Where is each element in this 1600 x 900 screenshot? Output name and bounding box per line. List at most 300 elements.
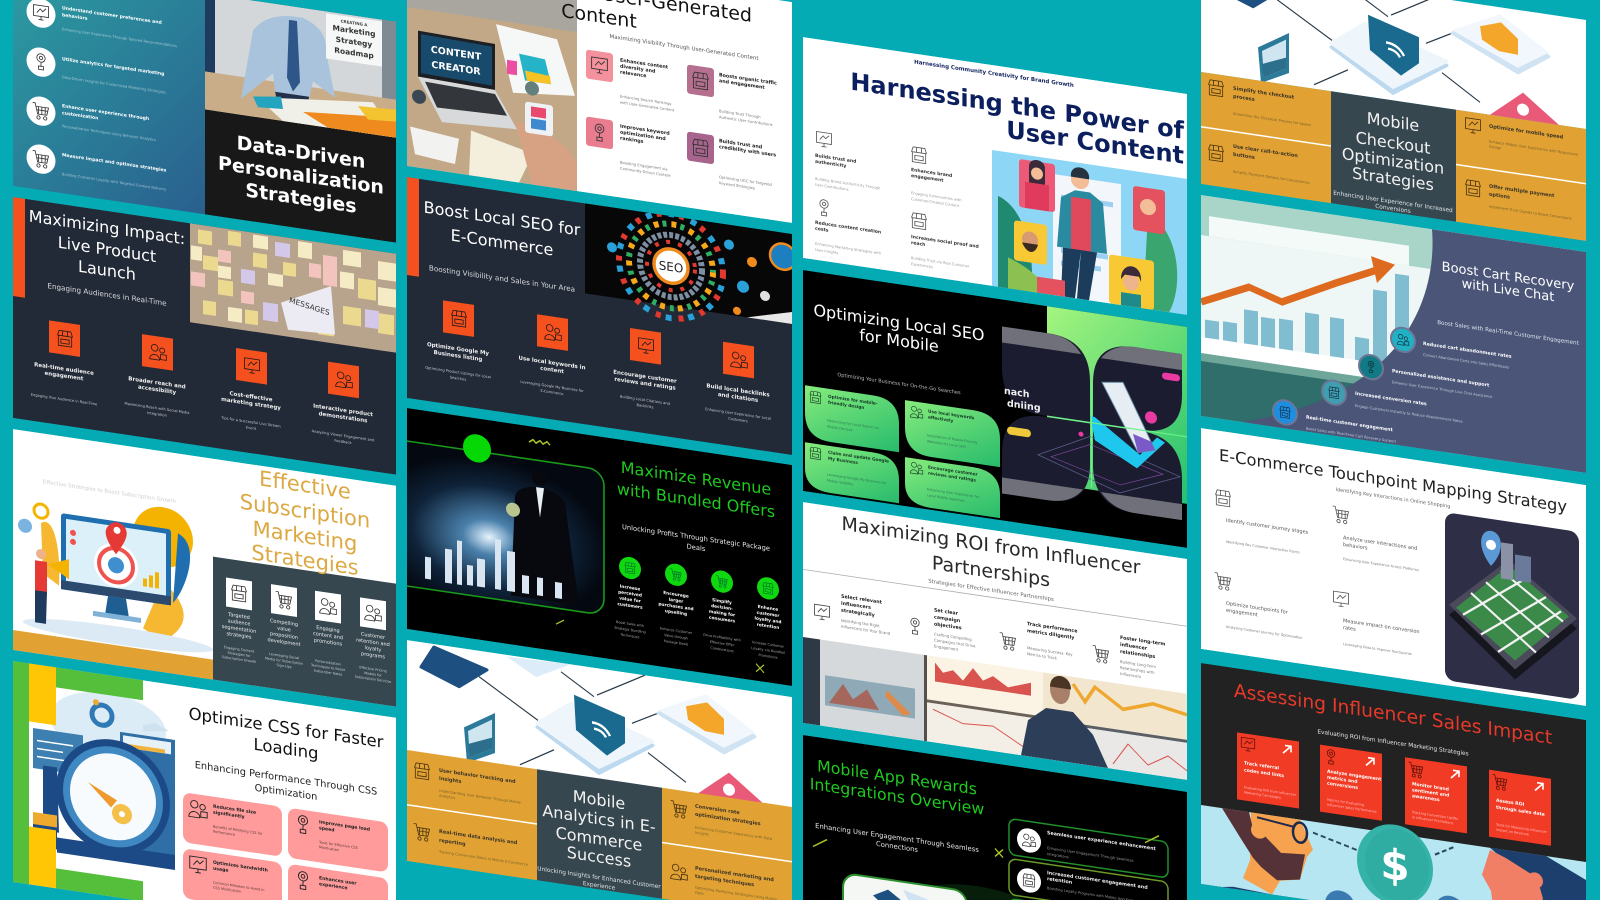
subtitle: Effective Strategies to Boost Subscription Growth bbox=[43, 479, 176, 505]
benefit cards: with User-Generated Content bbox=[620, 101, 675, 113]
dark title panel: Unlocking Insights for Enhanced Customer bbox=[537, 866, 661, 891]
green leaf cards: Encourage customer bbox=[928, 465, 979, 478]
feature icons and text: Analyzing Viewer Engagement and bbox=[312, 429, 374, 442]
title: Maximizing Impact: bbox=[29, 206, 185, 248]
pink benefit cards: Enhances user bbox=[319, 875, 357, 887]
title: for Mobile bbox=[859, 325, 939, 356]
illustration: target monitor bbox=[18, 486, 213, 659]
red metric cards: Assess ROI bbox=[1496, 798, 1525, 808]
feature icons and text bbox=[425, 298, 771, 427]
subtitle: Deals bbox=[687, 542, 706, 553]
slide: Maximizing ROI from Influencer Partnerships bbox=[803, 502, 1187, 780]
photo: content creator desk bbox=[407, 0, 577, 191]
feature circles and text: value for bbox=[619, 595, 642, 605]
list items with teal circles: Increased conversion rates bbox=[1355, 391, 1427, 407]
gold left panel bbox=[407, 750, 537, 880]
title bbox=[424, 198, 581, 264]
dark feature panel: content and bbox=[313, 631, 343, 641]
slide: Mobile App Rewards Integrations Overview bbox=[803, 735, 1187, 900]
outlined image bbox=[843, 873, 967, 900]
green leaf cards: Use local keywords bbox=[928, 409, 975, 421]
four strategy items: Building Long-Term bbox=[1120, 659, 1156, 669]
illustration: creators bbox=[992, 150, 1187, 315]
outlined feature items bbox=[1009, 818, 1168, 900]
benefit cards: Enhances content bbox=[620, 58, 669, 71]
list items with teal circles: Reduced cart abandonment rates bbox=[1423, 341, 1512, 360]
pink benefit cards: Common Mistakes to Avoid in bbox=[213, 881, 264, 892]
benefit cards: Boosting Engagement via bbox=[620, 161, 668, 172]
photo: content creator desk: CONTENT bbox=[431, 45, 482, 63]
outlined feature items: retention bbox=[1047, 876, 1073, 886]
dark title panel: Analytics in E- bbox=[542, 801, 656, 837]
four strategy items: Metrics to Track bbox=[1027, 651, 1058, 661]
feature circles and text: upselling bbox=[665, 608, 687, 617]
four touchpoint cards: Measure impact on conversion bbox=[1343, 618, 1420, 635]
title: E-Commerce bbox=[451, 226, 553, 260]
title: Mobile App Rewards bbox=[817, 756, 977, 799]
feature icons and text: Interactive product bbox=[313, 403, 373, 418]
title: E-Commerce Touchpoint Mapping Strategy bbox=[1219, 446, 1567, 516]
four strategy items: strategically bbox=[841, 608, 876, 619]
title bbox=[218, 128, 384, 222]
four strategy items: Crafting Compelling bbox=[934, 631, 972, 642]
subtitle: Connections bbox=[876, 840, 918, 854]
list items: Personalization Techniques Using Behavior Analytics bbox=[62, 124, 156, 142]
illustration: commerce network bbox=[407, 640, 792, 811]
red metric cards: awareness bbox=[1412, 793, 1440, 803]
image: isometric city block bbox=[1445, 512, 1579, 700]
red metric cards: Marketing Campaigns bbox=[1244, 790, 1281, 800]
dash decorations bbox=[813, 784, 1159, 898]
illustration: speed gauge bbox=[33, 682, 175, 870]
dark title panel: Conversions bbox=[1375, 204, 1411, 215]
feature icons and text bbox=[31, 318, 374, 448]
list items: Measure impact and optimize strategies bbox=[62, 152, 167, 174]
title: Data-Driven bbox=[237, 131, 365, 173]
pink benefit cards: Performance bbox=[213, 830, 235, 837]
feature circles and text: Techniques bbox=[620, 632, 640, 639]
feature icons and text: Customers bbox=[728, 417, 748, 423]
feature icons and text: marketing strategy bbox=[221, 397, 281, 412]
red metric cards: Tools for Measuring Influencer bbox=[1495, 823, 1547, 834]
subtitle: Engaging Audiences in Real-Time bbox=[47, 281, 167, 308]
gold left panel: Real-time data analysis and bbox=[439, 829, 518, 846]
feature circles and text: Enhance bbox=[758, 604, 778, 613]
divider line bbox=[803, 569, 1187, 627]
photo: businessman above city bbox=[387, 438, 604, 615]
four strategy items: influencer bbox=[1120, 642, 1148, 652]
dark title panel: Enhancing User Experience for Increased bbox=[1333, 191, 1453, 214]
four strategy items: campaign bbox=[934, 614, 961, 624]
red metric cards bbox=[1237, 732, 1551, 846]
four touchpoint cards: behaviors bbox=[1343, 542, 1368, 552]
red metric cards: in Influencer Promotions bbox=[1412, 815, 1453, 825]
slide: User-Generated Content bbox=[407, 0, 792, 223]
feature icons and text: Encourage customer bbox=[613, 370, 677, 385]
feature circles and text: Package Deals bbox=[664, 639, 689, 647]
four touchpoint cards: Analyzing Customer Journey for Optimization bbox=[1226, 625, 1302, 640]
title bbox=[189, 704, 384, 773]
feature list: User Contributions bbox=[815, 183, 849, 192]
slide: Mobile Checkout Optimization Strategies bbox=[1201, 0, 1586, 241]
feature icons and text: Feedback bbox=[334, 439, 352, 445]
illustration: commerce network bbox=[1201, 0, 1586, 131]
gold right panel: Design bbox=[1489, 145, 1501, 150]
title: Live Product bbox=[58, 233, 156, 266]
feature icons and text: content bbox=[540, 366, 564, 375]
title bbox=[29, 206, 185, 291]
dark feature panel: Personalization bbox=[315, 659, 341, 667]
dark feature panel: Leveraging Social bbox=[269, 652, 299, 660]
red metric cards: sentiment and bbox=[1412, 787, 1449, 799]
feature list: Customer-Created Content bbox=[911, 197, 960, 208]
feature list: Reduces content creation bbox=[815, 220, 881, 236]
dark title panel: Mobile bbox=[573, 787, 625, 813]
green leaf cards: Importance of Mobile-Friendly bbox=[927, 433, 978, 445]
subtitle: Enhancing Performance Through CSS bbox=[195, 760, 377, 798]
pink benefit cards: experience bbox=[319, 881, 348, 891]
four strategy items: Relationships with bbox=[1120, 665, 1155, 675]
dark feature panel: Engaging Content bbox=[224, 645, 255, 654]
photo: content creator desk: CREATOR bbox=[431, 60, 481, 78]
illustration: faces and dollar coin bbox=[1201, 796, 1586, 900]
green leaf cards: effectively bbox=[928, 415, 954, 424]
four strategy items: Track performance bbox=[1027, 621, 1078, 635]
pink benefit cards: CSS Minification bbox=[213, 886, 241, 894]
gold left panel: Streamline the Checkout Process for Speed bbox=[1233, 112, 1311, 127]
red metric cards: Evaluating ROI from Influencer bbox=[1244, 785, 1297, 797]
dark feature panel: Effective Pricing bbox=[359, 665, 387, 673]
benefit cards: Enhancing Search Rankings bbox=[620, 95, 671, 106]
benefit cards: and engagement bbox=[719, 78, 765, 91]
feature icons and text: E-Commerce bbox=[540, 389, 564, 396]
list items with teal circles: Engage Customers Instantly to Reduce Abandonment Rates bbox=[1355, 404, 1463, 424]
four touchpoint cards: Identifying Key Customer Interaction Points bbox=[1226, 540, 1300, 555]
four strategy items: Foster long-term bbox=[1120, 635, 1165, 648]
benefit cards: Building Trust Through bbox=[719, 109, 761, 119]
feature circles and text: Boost Sales with bbox=[616, 620, 644, 628]
gold left panel: User behavior tracking and bbox=[439, 768, 516, 785]
squiggle decoration bbox=[529, 439, 550, 445]
slide: Optimize CSS for Faster Loading bbox=[13, 661, 396, 900]
feature icons and text: Building Local Citations and bbox=[620, 395, 670, 406]
feature icons and text: Tips for a Successful Live Stream bbox=[220, 416, 281, 429]
photo: sticky notes wall bbox=[190, 223, 396, 353]
title: Optimize CSS for Faster bbox=[189, 704, 384, 752]
gold left panel: insights bbox=[439, 776, 461, 785]
four strategy items: Influencers for Your Brand bbox=[841, 624, 891, 636]
image: phone and dark petals bbox=[1002, 326, 1187, 521]
feature icons and text: Enhancing User Experience for Local bbox=[705, 407, 771, 421]
dark title panel: Commerce bbox=[556, 823, 642, 855]
outlined feature items: Increased customer engagement and bbox=[1047, 870, 1148, 891]
four strategy items: objectives bbox=[934, 621, 962, 631]
dark feature panel: Media for Subscription bbox=[265, 656, 303, 666]
slide: Maximize Revenue with Bundled Offers bbox=[387, 405, 792, 686]
list items: Building Customer Loyalty with Targeted Content Delivery bbox=[62, 172, 167, 192]
slate curved panel bbox=[1241, 201, 1586, 473]
gold right panel: options bbox=[1489, 192, 1510, 201]
pink benefit cards: significantly bbox=[213, 810, 245, 820]
photo: marketing roadmap bbox=[205, 0, 396, 138]
red metric cards: through sales data bbox=[1496, 805, 1545, 818]
feature circles and text: Promotions bbox=[758, 653, 778, 660]
feature list bbox=[815, 131, 979, 276]
green leaf cards: reviews and ratings bbox=[928, 471, 976, 484]
dark feature panel bbox=[213, 557, 396, 707]
benefit cards: Authentic User Contributions bbox=[719, 115, 773, 127]
list items: Understand customer preferences and bbox=[62, 5, 162, 26]
gold left panel: Analytics bbox=[439, 794, 455, 800]
feature circles and text: Strategic Bundling bbox=[614, 626, 646, 634]
dark title panel: Mobile bbox=[1367, 109, 1419, 135]
benefit cards: relevance bbox=[620, 70, 647, 80]
feature list: User Insights bbox=[815, 248, 838, 255]
gold right panel: optimization strategies bbox=[695, 812, 761, 827]
green dot decoration bbox=[463, 432, 491, 464]
gold left panel: Tracking Conversion Rates in Mobile E-Commerce bbox=[438, 850, 529, 867]
feature icons and text: Integration bbox=[147, 411, 167, 418]
red metric cards: Impact on Revenue bbox=[1496, 828, 1529, 837]
feature list: authenticity bbox=[815, 159, 846, 169]
feature list: engagement bbox=[911, 173, 944, 184]
feature icons and text: engagement bbox=[45, 371, 84, 382]
slide: Mobile Analytics in E-Commerce Success bbox=[407, 640, 792, 900]
title: User Content bbox=[1006, 116, 1184, 170]
gold left panel: Simplify Payment Options for Convenience bbox=[1233, 170, 1310, 185]
pink benefit cards: Benefits of Minifying CSS for bbox=[213, 825, 263, 836]
photo: marketing roadmap: Roadmap bbox=[334, 46, 374, 60]
title bbox=[240, 463, 370, 582]
subtitle: Enhancing User Engagement Through Seamless bbox=[815, 822, 979, 854]
gold right panel: Conversion rate bbox=[695, 804, 740, 816]
four strategy items: influencers bbox=[841, 601, 871, 611]
feature icons and text: Real-time audience bbox=[34, 362, 94, 377]
dark feature panel: loyalty bbox=[365, 645, 381, 654]
feature circles and text: loyalty and bbox=[755, 615, 781, 625]
title: Integrations Overview bbox=[810, 774, 984, 819]
gold left panel: buttons bbox=[1233, 152, 1255, 161]
title: Subscription bbox=[240, 489, 370, 533]
title: Maximizing ROI from Influencer bbox=[842, 512, 1141, 579]
green leaf cards: Claim and update Google bbox=[828, 450, 889, 465]
list items: behaviors bbox=[62, 12, 88, 22]
title: Marketing bbox=[253, 516, 357, 556]
feature circles and text: decision- bbox=[711, 603, 733, 612]
green leaf cards: Local Mobile Searches bbox=[927, 493, 965, 503]
orange footer band bbox=[13, 630, 213, 680]
green leaf cards bbox=[805, 385, 1000, 518]
title: Strategies bbox=[251, 539, 359, 580]
pink benefit cards: Minification bbox=[319, 845, 339, 852]
gold right panel: Enhancing Customer Experience with Data bbox=[695, 826, 772, 841]
gold left panel: Simplify the checkout bbox=[1233, 86, 1295, 101]
feature icons and text: Engaging Your Audience in Real-Time bbox=[31, 393, 98, 407]
red metric cards: Tracking Conversion Uplifts bbox=[1411, 810, 1458, 821]
feature icons and text: reviews and ratings bbox=[614, 377, 676, 392]
dark title panel: Experience bbox=[583, 881, 616, 892]
benefit cards: Builds trust and bbox=[719, 138, 763, 151]
feature circles and text: purchases and bbox=[658, 601, 694, 612]
benefit cards: optimization and bbox=[620, 130, 666, 142]
four touchpoint cards: Enhancing User Experience Across Platforms bbox=[1343, 557, 1419, 572]
red metric cards: metrics and bbox=[1327, 775, 1358, 785]
four touchpoint cards: Analyze user interactions and bbox=[1343, 535, 1417, 552]
dark title panel: Strategies bbox=[1352, 163, 1434, 194]
title: Loading bbox=[253, 735, 319, 763]
gold right panel: Personalized marketing and bbox=[695, 866, 774, 883]
benefit cards: Optimizing UGC for Targeted bbox=[719, 175, 772, 187]
gold right panel: targeting techniques bbox=[695, 874, 754, 888]
feature circles and text: Increase Customer bbox=[752, 640, 785, 649]
dark feature panel: Models for bbox=[364, 671, 382, 678]
title: Strategies bbox=[245, 178, 357, 218]
red metric cards: Influencer Sales Performance bbox=[1327, 803, 1377, 814]
green leaf cards: friendly design bbox=[828, 400, 864, 411]
feature icons and text: Event bbox=[246, 425, 257, 431]
feature icons and text: Maximizing Reach with Social Media bbox=[125, 402, 189, 415]
four touchpoint cards: Optimize touchpoints for bbox=[1226, 601, 1289, 616]
gold right panel: Enhance Mobile User Experience with Responsive bbox=[1489, 140, 1579, 157]
feature circles and text: consumers bbox=[709, 615, 736, 625]
slide: Boost Local SEO for E-Commerce bbox=[407, 175, 796, 456]
feature icons and text: accessibility bbox=[138, 385, 176, 396]
four touchpoint cards bbox=[1215, 489, 1420, 657]
feature icons and text: Searches bbox=[450, 375, 466, 382]
four touchpoint cards: engagement bbox=[1226, 608, 1258, 618]
list items with teal circles bbox=[1273, 309, 1512, 461]
feature list: Experiences bbox=[911, 262, 933, 269]
title: Optimizing Local SEO bbox=[813, 301, 985, 345]
slide: Maximizing Impact Live Product Launch bbox=[13, 197, 396, 475]
feature list: Enhancing Marketing Strategies with bbox=[815, 242, 881, 256]
title: Effective bbox=[259, 466, 351, 504]
feature icons and text: Cost-effective bbox=[230, 391, 273, 403]
list items with teal circles: Enhance User Experience Through Live Chat Assistance bbox=[1392, 380, 1493, 399]
feature circles and text: Effective Offer bbox=[710, 640, 735, 648]
list items with teal circles: Personalized assistance and support bbox=[1392, 368, 1490, 389]
photo: marketing roadmap: Strategy bbox=[336, 35, 372, 49]
feature list: Builds trust and bbox=[815, 153, 856, 165]
list items with teal circles: Boost Sales with Real-Time Cart Recovery Support bbox=[1306, 427, 1397, 444]
slide: Harnessing the Power of User Content bbox=[803, 37, 1187, 315]
feature list: Engaging Communities with bbox=[911, 191, 961, 202]
slide: Effective Subscription Marketing Strategies bbox=[13, 429, 396, 707]
four strategy items: Campaigns that Drive bbox=[934, 637, 976, 649]
feature list: Building Trust via Real Customer bbox=[911, 256, 970, 269]
feature icons and text: Optimize Google My bbox=[427, 342, 489, 357]
photo: marketing roadmap: Marketing bbox=[333, 23, 375, 39]
orange accent bar bbox=[407, 177, 419, 277]
four strategy items: Influencers bbox=[1120, 671, 1141, 679]
outlined feature items: Seamless user experience enhancement bbox=[1047, 830, 1157, 852]
benefit cards: credibility with users bbox=[719, 144, 776, 159]
feature circles and text: retention bbox=[757, 622, 779, 631]
feature icons and text: demonstrations bbox=[319, 411, 368, 425]
slide: E-Commerce Touchpoint Mapping Strategy bbox=[1201, 428, 1586, 706]
pink benefit cards: Optimizes bandwidth bbox=[213, 860, 268, 874]
title: Partnerships bbox=[932, 551, 1050, 592]
gold right panel bbox=[1456, 110, 1586, 241]
title: Personalization bbox=[218, 151, 384, 199]
green and yellow frame blocks bbox=[13, 661, 143, 900]
illustration: faces and dollar coin: $ bbox=[1380, 839, 1410, 892]
list items with teal circles: Real-time customer engagement bbox=[1306, 415, 1393, 433]
gold right panel: Optimize for mobile speed bbox=[1489, 124, 1564, 141]
photo: analyst facing charts bbox=[803, 637, 1187, 780]
title (partly off-canvas) bbox=[451, 0, 752, 50]
gold right panel: Data bbox=[695, 891, 704, 896]
title: Harnessing the Power of bbox=[850, 68, 1184, 145]
list items: customization bbox=[62, 110, 98, 122]
four strategy items: Engagement bbox=[934, 643, 959, 652]
dark title panel: Success bbox=[567, 843, 631, 871]
benefit cards: diversity and bbox=[620, 64, 656, 75]
four strategy items: Set clear bbox=[934, 607, 959, 617]
dark feature panel: Targeted bbox=[227, 612, 250, 621]
feature circles and text: Enhance Customer bbox=[660, 626, 693, 635]
dark feature panel: Subscriber Rates bbox=[314, 669, 343, 677]
orange accent bar bbox=[13, 197, 25, 298]
gold right panel: Offer multiple payment bbox=[1489, 184, 1555, 199]
subtitle: Unlocking Profits Through Strategic Package bbox=[622, 523, 770, 553]
green leaf cards: Leveraging Google My Business for bbox=[827, 473, 887, 485]
feature circles and text: customers bbox=[617, 601, 643, 611]
list items: Enhancing User Experience Through Tailored Recommendations bbox=[62, 27, 177, 48]
dark feature panel: Sign-Ups bbox=[276, 663, 292, 669]
dark feature panel: programs bbox=[361, 651, 385, 661]
image: growth chart on screen bbox=[1201, 195, 1586, 473]
dark feature panel: proposition bbox=[270, 631, 298, 641]
slide: Assessing Influencer Sales Impact bbox=[1201, 663, 1586, 900]
dark background bbox=[13, 197, 396, 475]
dark feature panel: retention and bbox=[356, 637, 390, 648]
red metric cards: Analyze engagement bbox=[1327, 769, 1382, 783]
dark feature panel: strategies bbox=[227, 631, 252, 641]
gold right panel: Insights bbox=[695, 831, 709, 837]
feature circles and text bbox=[614, 555, 785, 661]
subtitle: Boost Sales with Real-Time Customer Engagement bbox=[1437, 320, 1580, 347]
pink benefit cards bbox=[183, 792, 388, 900]
green leaf cards: Optimize for mobile- bbox=[828, 394, 878, 407]
dark feature panel: segmentation bbox=[222, 624, 256, 635]
benefit cards: Community-Driven Content bbox=[620, 167, 671, 178]
dark feature panel: Engaging bbox=[316, 625, 340, 634]
feature icons and text: Build local backlinks bbox=[706, 383, 770, 399]
feature icons and text: Business listing bbox=[434, 350, 482, 363]
title: Maximize Revenue bbox=[621, 458, 771, 499]
list items bbox=[26, 0, 177, 194]
title: Launch bbox=[78, 257, 136, 284]
title: with Live Chat bbox=[1462, 277, 1554, 305]
neon green backdrop bbox=[1047, 306, 1187, 504]
feature icons and text: Use local keywords in bbox=[519, 356, 586, 371]
four strategy items: metrics diligently bbox=[1027, 628, 1075, 641]
four strategy items bbox=[814, 590, 1165, 683]
dark feature panel: Subscription Services bbox=[355, 675, 391, 684]
four strategy items: relationships bbox=[1120, 649, 1155, 660]
feature list: reach bbox=[911, 240, 925, 248]
image: SEO network sphere: SEO bbox=[659, 258, 683, 276]
four touchpoint cards: Identify customer journey stages bbox=[1226, 518, 1309, 536]
feature list: Increases social proof and bbox=[911, 234, 979, 250]
green leaf cards: Websites for Local SEO bbox=[927, 439, 966, 449]
red metric cards: conversions bbox=[1327, 781, 1358, 791]
outlined feature items: Integrations bbox=[1047, 852, 1069, 859]
gold left panel: Understanding User Behavior Through Mobile bbox=[439, 789, 522, 805]
dark title panel: Checkout bbox=[1356, 128, 1430, 158]
gold left panel: Use clear call-to-action bbox=[1233, 144, 1298, 159]
